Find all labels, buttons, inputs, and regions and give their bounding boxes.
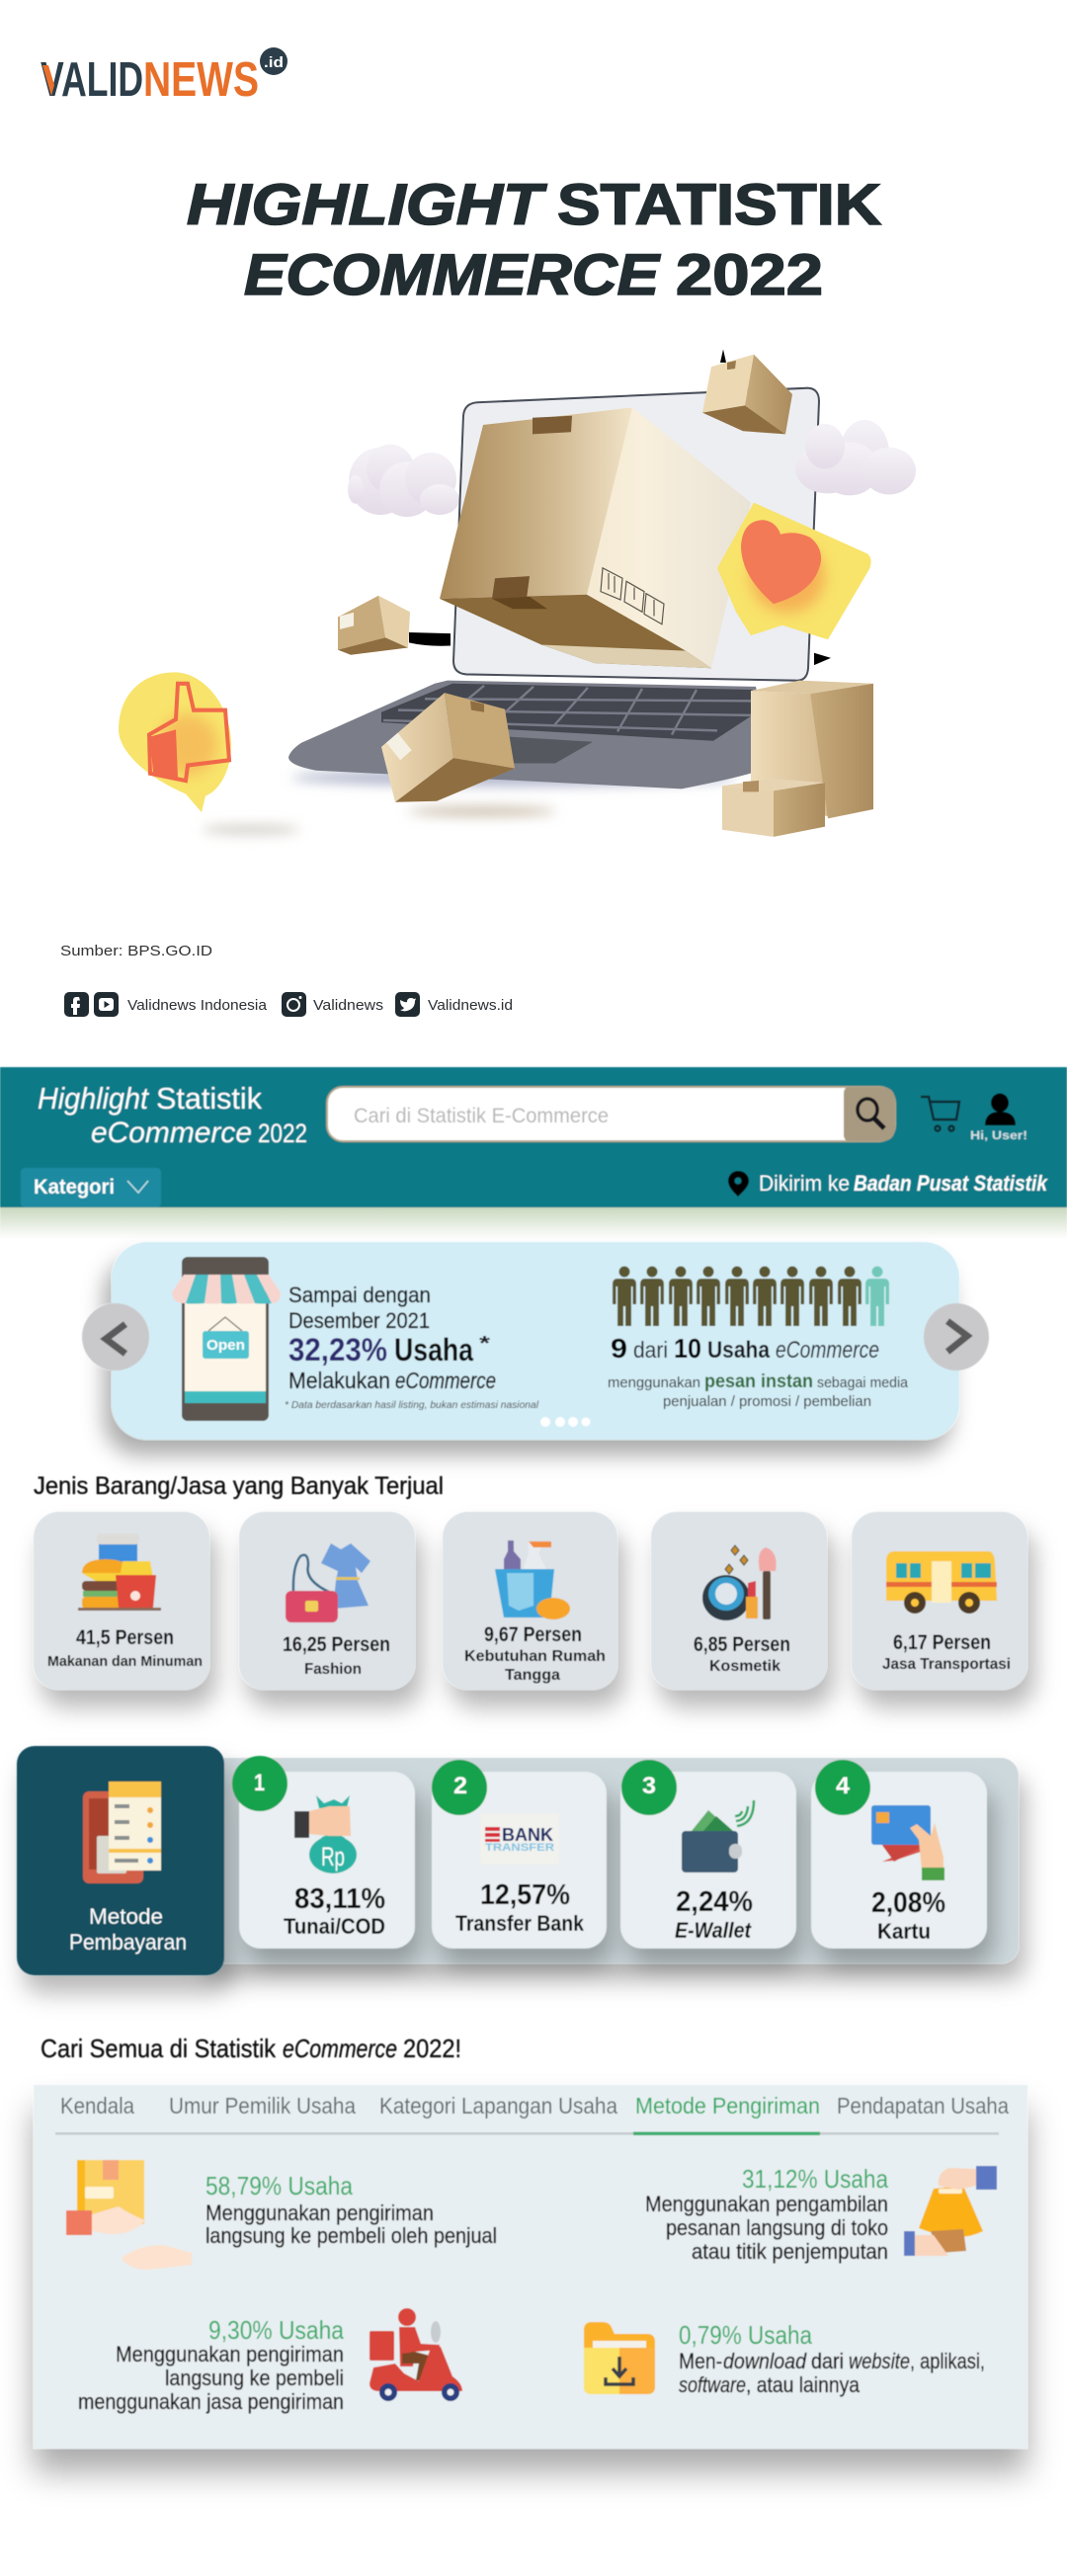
statistic: 32,23%: Melakukan <box>288 1368 390 1393</box>
category button <box>21 1168 161 1207</box>
rank badge 4 <box>815 1760 870 1815</box>
card: makanan dan minuman: Makanan dan Minuman <box>47 1653 203 1670</box>
card: jasa transportasi: 6,17 Persen <box>893 1631 991 1654</box>
header title: Highlight <box>38 1081 149 1116</box>
heading: search all: 2022! <box>403 2034 461 2063</box>
icon: phone shop: Open <box>206 1337 245 1354</box>
payment heading block: Pembayaran <box>69 1930 187 1954</box>
shipping: pick-up <box>645 2164 997 2264</box>
statistic: 9 dari 10: pesan instan <box>704 1371 813 1392</box>
statistic: 32,23%: Usaha <box>394 1332 473 1368</box>
social media row: Validnews <box>313 997 383 1014</box>
icon: food <box>78 1534 161 1611</box>
icon: user <box>985 1093 1016 1125</box>
payment: tunai: Tunai/COD <box>284 1914 385 1939</box>
header title: Statistik <box>156 1081 262 1116</box>
panel: shipping method <box>34 2085 1027 2449</box>
payment: e-wallet <box>620 1760 796 1949</box>
category button: Kategori <box>34 1176 115 1199</box>
card: kosmetik: Kosmetik <box>709 1658 780 1675</box>
title <box>187 173 881 307</box>
logo: Validnews.id: .id <box>264 54 284 71</box>
header title <box>38 1081 307 1149</box>
rank badge 2 <box>432 1760 487 1815</box>
panel: payment method <box>17 1746 1019 1975</box>
statistic: 9 dari 10: 9 <box>611 1333 627 1364</box>
social media row: Validnews Indonesia <box>127 997 268 1014</box>
payment: tunai: 83,11% <box>294 1883 385 1915</box>
payment: tunai <box>232 1756 415 1949</box>
icon: money bag <box>294 1795 357 1873</box>
tabs: Pendapatan Usaha <box>837 2093 1009 2119</box>
statistic: 32,23%: 32,23% <box>288 1332 387 1368</box>
payment: transfer bank <box>432 1760 607 1949</box>
icon: cosmetics <box>702 1545 777 1620</box>
heading: search all: eCommerce <box>283 2034 397 2063</box>
icon: money bag: Rp <box>321 1842 345 1871</box>
card: fashion: Fashion <box>304 1661 362 1678</box>
tabs: Kategori Lapangan Usaha <box>379 2093 617 2119</box>
big parcel <box>440 407 751 668</box>
keyboard <box>381 684 753 741</box>
header bar: Hi, User! <box>970 1128 1027 1142</box>
laptop screen <box>453 388 819 681</box>
panel: goods cards <box>34 1512 1027 1690</box>
social media row: Validnews.id <box>428 997 513 1014</box>
icon: wallet <box>682 1800 754 1872</box>
statistic: 9 dari 10: dari <box>633 1337 668 1363</box>
heart badge <box>717 503 871 639</box>
statistic: 9 dari 10: Usaha <box>707 1337 771 1364</box>
header title: 2022 <box>258 1119 307 1148</box>
shipping: pick-up: pesanan langsung di toko <box>666 2215 888 2240</box>
icon: facebook <box>64 992 89 1017</box>
title: STATISTIK <box>557 173 881 237</box>
arrow right <box>924 1303 989 1371</box>
icon: bill <box>83 1782 161 1883</box>
small parcel top right <box>702 355 792 434</box>
shipping: download: , atau lainnya <box>746 2372 861 2397</box>
logo: Validnews.id: VALID <box>41 53 143 107</box>
shipping: pick-up: Menggunakan pengambilan <box>645 2192 888 2216</box>
cloud right <box>795 420 916 495</box>
shipping: pick-up: atau titik penjemputan <box>692 2239 888 2264</box>
title: HIGHLIGHT <box>187 173 547 237</box>
card: fashion <box>239 1512 415 1690</box>
payment heading block <box>17 1746 224 1975</box>
statistic: 9 dari 10: penjualan / promosi / pembelian <box>663 1393 871 1410</box>
icon: youtube <box>94 992 119 1017</box>
logo: Validnews.id: NEWS <box>143 53 259 107</box>
banner carousel <box>82 1242 989 1440</box>
heading: search all: Cari Semua di Statistik <box>41 2034 277 2063</box>
tabs <box>55 2093 1009 2135</box>
shipping: download <box>584 2320 985 2397</box>
payment: e-wallet: 2,24% <box>676 1886 753 1918</box>
tall parcel stack <box>722 681 873 837</box>
rank badge 2: 2 <box>453 1773 467 1799</box>
card: jasa transportasi: Jasa Transportasi <box>882 1656 1011 1673</box>
icon: bus <box>886 1551 997 1614</box>
statistic: 9 dari 10: eCommerce <box>776 1337 879 1364</box>
search bar <box>327 1087 895 1141</box>
statistic: 32,23% <box>285 1283 539 1411</box>
thumbs-up badge <box>119 672 231 812</box>
icon: bank transfer <box>480 1813 559 1865</box>
icon: parcel in hand <box>66 2160 192 2270</box>
card: kosmetik <box>651 1512 827 1690</box>
card: kebutuhan rumah tangga: Kebutuhan Rumah <box>464 1648 606 1665</box>
card: kosmetik: 6,85 Persen <box>694 1633 790 1656</box>
payment: e-wallet: E-Wallet <box>675 1918 752 1943</box>
pictogram: 9 of 10 people <box>613 1267 889 1326</box>
rank badge 1 <box>232 1756 287 1811</box>
shipping: download: download <box>723 2349 807 2373</box>
header bar <box>0 1067 1067 1239</box>
shipping: direct by seller: Menggunakan pengiriman <box>205 2201 434 2225</box>
shipping: download: software <box>679 2372 746 2397</box>
icon: magnifier <box>858 1099 884 1128</box>
icon: bag and dress <box>286 1543 370 1622</box>
statistic: 32,23%: * Data berdasarkan hasil listing, bukan estimasi nasional <box>285 1400 539 1411</box>
icon: download folder <box>584 2322 655 2394</box>
icon: bank transfer: BANK <box>502 1825 553 1845</box>
payment: kartu <box>811 1760 987 1949</box>
title: 2022 <box>676 243 823 307</box>
icon: delivery scooter <box>369 2308 462 2401</box>
icon: credit card <box>871 1805 944 1880</box>
statistic: 32,23%: Desember 2021 <box>288 1308 430 1333</box>
icon: twitter <box>395 992 420 1017</box>
payment: transfer bank: Transfer Bank <box>455 1911 585 1936</box>
payment heading block: Metode <box>89 1904 163 1929</box>
carousel dots <box>540 1417 591 1427</box>
icon: cart <box>921 1097 959 1130</box>
shipping: download: , aplikasi, <box>910 2349 985 2373</box>
delivery location <box>728 1171 1049 1197</box>
statistic: 9 dari 10 <box>608 1333 909 1410</box>
shipping: download: dari <box>811 2349 844 2373</box>
search bar: Cari di Statistik E-Commerce <box>354 1105 609 1127</box>
touchpad <box>476 734 593 763</box>
rank badge 1: 1 <box>254 1770 265 1796</box>
header title: eCommerce <box>91 1117 252 1149</box>
shipping: download: Men- <box>679 2349 722 2373</box>
tabs: Umur Pemilik Usaha <box>169 2093 356 2119</box>
card: fashion: 16,25 Persen <box>283 1633 390 1656</box>
handling marks <box>601 568 664 624</box>
statistic: 32,23%: eCommerce <box>395 1368 496 1393</box>
shipping: pick-up: 31,12% Usaha <box>742 2164 888 2194</box>
ground shadows <box>202 770 736 835</box>
shipping: courier <box>78 2308 462 2414</box>
statistic: 32,23%: * <box>479 1333 490 1355</box>
shipping: download: 0,79% Usaha <box>679 2320 812 2350</box>
shipping: courier: 9,30% Usaha <box>208 2315 344 2345</box>
rank badge 4: 4 <box>836 1773 851 1799</box>
rank badge 3 <box>621 1760 677 1815</box>
card: kebutuhan rumah tangga: 9,67 Persen <box>484 1623 582 1646</box>
shipping: courier: menggunakan jasa pengiriman <box>78 2389 344 2414</box>
icon: phone shop <box>172 1257 281 1421</box>
arrow left <box>82 1303 149 1371</box>
icon: handover bag <box>904 2166 997 2256</box>
small parcel left <box>338 596 410 655</box>
statistic: 9 dari 10: sebagai media <box>817 1374 909 1391</box>
payment: kartu: Kartu <box>877 1919 931 1944</box>
shipping: direct by seller <box>66 2160 497 2270</box>
front parcel <box>381 693 515 802</box>
icon: instagram <box>282 992 306 1017</box>
card: kebutuhan rumah tangga: Tangga <box>505 1667 560 1684</box>
tabs: Metode Pengiriman <box>635 2093 820 2119</box>
shipping: direct by seller: 58,79% Usaha <box>205 2171 353 2201</box>
shipping: courier: Menggunakan pengiriman <box>116 2342 344 2367</box>
logo: Validnews.id <box>41 47 287 107</box>
shipping: direct by seller: langsung ke pembeli oleh penjual <box>205 2223 497 2248</box>
heading: search all <box>41 2034 461 2063</box>
card: kebutuhan rumah tangga <box>443 1512 617 1690</box>
shipping: courier: langsung ke pembeli <box>165 2366 344 2390</box>
title: ECOMMERCE <box>244 243 662 307</box>
black stray shapes <box>409 349 831 665</box>
statistic: 9 dari 10: menggunakan <box>608 1374 700 1391</box>
statistic: 9 dari 10: 10 <box>674 1333 701 1364</box>
statistic: 32,23%: Sampai dengan <box>288 1283 431 1307</box>
shipping: download: website <box>849 2349 910 2373</box>
tabs: Kendala <box>60 2093 134 2119</box>
lower screenshot section <box>0 1067 1067 2449</box>
card: makanan dan minuman: 41,5 Persen <box>76 1626 174 1649</box>
delivery location: Dikirim ke <box>759 1171 850 1196</box>
rank badge 3: 3 <box>642 1773 656 1799</box>
heading: best-selling goods: Jenis Barang/Jasa yang Banyak Terjual <box>34 1472 444 1500</box>
icon: cleaning supplies <box>495 1540 570 1620</box>
icon: bank transfer: TRANSFER <box>485 1842 554 1854</box>
card: makanan dan minuman <box>34 1512 209 1690</box>
cloud left <box>348 445 459 517</box>
source note: Sumber: BPS.GO.ID <box>60 943 212 959</box>
payment: transfer bank: 12,57% <box>480 1879 570 1911</box>
payment band <box>198 1758 1019 1963</box>
social media row <box>64 992 513 1017</box>
illustration: laptop with parcels <box>119 349 916 837</box>
payment: kartu: 2,08% <box>871 1887 945 1919</box>
laptop base <box>288 681 771 789</box>
card: jasa transportasi <box>852 1512 1027 1690</box>
